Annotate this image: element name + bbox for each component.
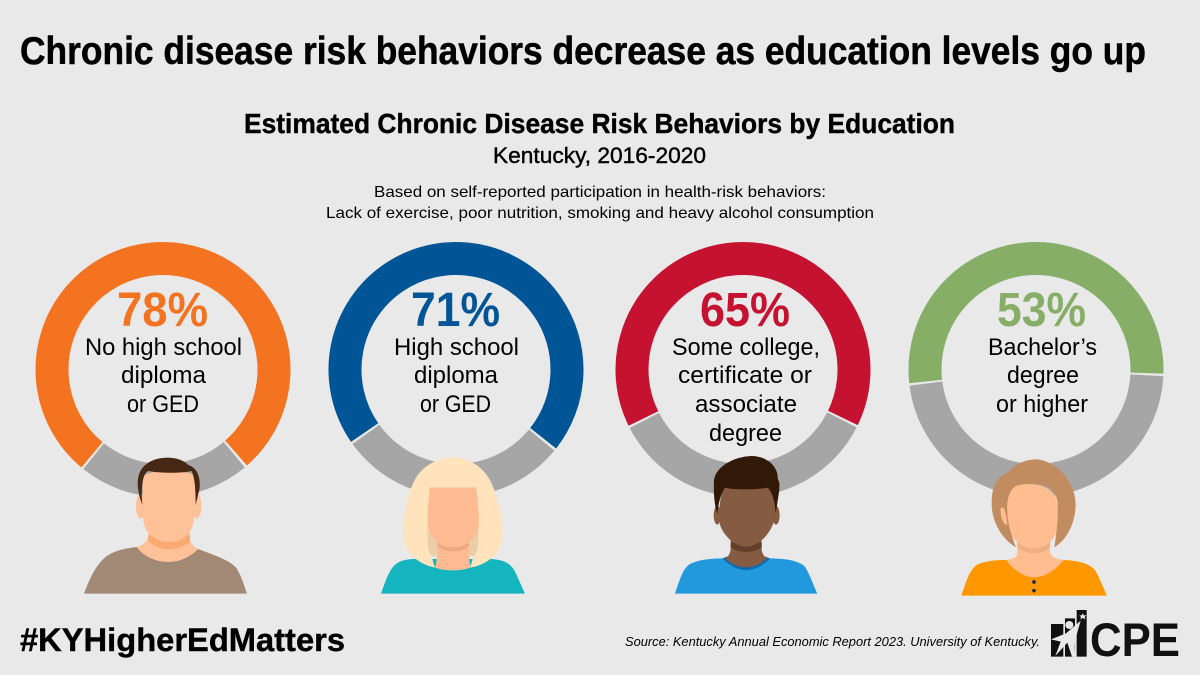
panel: some college [594,220,892,594]
value 53%: 53% [997,284,1086,337]
label: Bachelor’s [988,334,1097,361]
description text: Based on self-reported participation in health-risk behaviors: [374,184,826,201]
label [672,334,820,447]
label: or GED [127,391,199,418]
panel: high school diploma [300,213,612,594]
donut chart 65% [594,220,892,519]
donut chart 71% [300,213,612,526]
source note: Source: Kentucky Annual Economic Report 2023. University of Kentucky. [625,635,1040,649]
donut chart 78% [7,213,319,526]
label: diploma [414,362,499,389]
label: or GED [420,391,491,418]
label [394,334,519,418]
panel: bachelor's degree [914,248,1158,596]
label [988,334,1097,418]
hashtag: #KYHigherEdMatters [20,622,345,658]
icon: woman with blonde hair [381,457,525,594]
icon: man with blue shirt [675,456,817,594]
label: or higher [996,391,1088,418]
icon: man with brown shirt [84,458,247,594]
value 78%: 78% [117,284,208,337]
logo: CPE [1051,610,1180,666]
donut chart 53% [914,248,1158,491]
icon: woman with orange shirt [961,459,1107,596]
value 65%: 65% [700,284,790,337]
label [85,334,242,418]
panel: no high school diploma [7,213,319,594]
value 71%: 71% [411,284,500,337]
label: Some college, [672,334,820,361]
label: associate [695,391,797,418]
label: diploma [121,362,207,389]
label: degree [1007,362,1079,389]
description text [326,184,874,222]
chart subtitle: Kentucky, 2016-2020 [493,143,706,168]
label: No high school [85,334,242,361]
label: certificate or [678,362,812,389]
label: High school [394,334,519,361]
logo text: CPE [1090,613,1180,666]
chart heading [244,108,955,168]
chart title: Estimated Chronic Disease Risk Behaviors by Education [244,108,955,139]
description text: Lack of exercise, poor nutrition, smoking and heavy alcohol consumption [326,205,874,222]
label: degree [709,420,782,447]
icon: bars with figure [1051,610,1087,657]
